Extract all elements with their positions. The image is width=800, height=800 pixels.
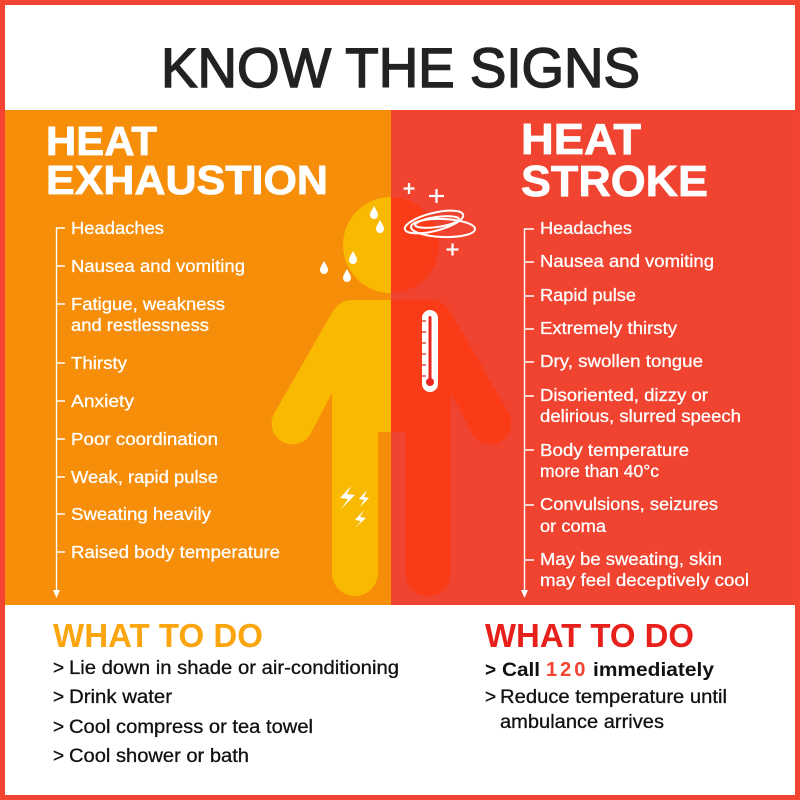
symptom list: heat exhaustion: Anxiety xyxy=(71,391,134,411)
symptom list: heat stroke xyxy=(540,218,749,590)
symptom list: heat exhaustion: Raised body temperature xyxy=(71,542,280,562)
action list: stroke: > xyxy=(485,660,496,681)
symptom list: heat stroke: Disoriented, dizzy or xyxy=(540,385,708,405)
symptom list: heat stroke: more than 40°c xyxy=(540,461,659,481)
symptom list: heat stroke: delirious, slurred speech xyxy=(540,406,741,426)
action list: stroke: immediately xyxy=(593,660,714,681)
symptom list: heat exhaustion: Fatigue, weakness xyxy=(71,294,225,314)
symptom list: heat exhaustion: Thirsty xyxy=(71,353,127,373)
symptom list: heat exhaustion: Nausea and vomiting xyxy=(71,256,245,276)
bracket arrow: right symptoms xyxy=(521,229,534,598)
action list: exhaustion: Cool shower or bath xyxy=(69,746,249,767)
action list: stroke: ambulance arrives xyxy=(500,712,664,733)
action list: stroke xyxy=(485,659,727,733)
symptom list: heat exhaustion xyxy=(71,218,280,562)
heading: what to do, stroke: WHAT TO DO xyxy=(485,617,694,654)
symptom list: heat stroke: Headaches xyxy=(540,218,632,238)
figure: half-yellow half-red person xyxy=(272,197,511,596)
action list: exhaustion: > xyxy=(53,658,64,679)
panel: heat exhaustion background xyxy=(5,110,391,605)
symptom list: heat exhaustion: Weak, rapid pulse xyxy=(71,467,218,487)
figure right half xyxy=(391,197,511,596)
action list: exhaustion: Drink water xyxy=(69,687,173,708)
action list: exhaustion: Lie down in shade or air-conditioning xyxy=(69,658,399,679)
heading: heat exhaustion: EXHAUSTION xyxy=(46,157,328,203)
icon: thermometer xyxy=(422,310,438,392)
symptom list: heat exhaustion: Sweating heavily xyxy=(71,504,211,524)
icon: sweat drops xyxy=(320,206,384,282)
action list: exhaustion xyxy=(53,658,399,767)
symptom list: heat stroke: Rapid pulse xyxy=(540,285,636,305)
heading: heat stroke: HEAT xyxy=(521,115,641,164)
symptom list: heat stroke: Convulsions, seizures xyxy=(540,494,718,514)
action list: stroke: 120 xyxy=(546,659,588,681)
figure left half xyxy=(272,197,391,596)
action list: exhaustion: Cool compress or tea towel xyxy=(69,717,313,738)
symptom list: heat stroke: Dry, swollen tongue xyxy=(540,351,703,371)
heading: heat exhaustion xyxy=(46,118,328,203)
symptom list: heat exhaustion: Poor coordination xyxy=(71,429,218,449)
bracket arrow: left symptoms xyxy=(53,228,65,598)
icon: lightning bolts xyxy=(340,486,369,528)
action list: exhaustion: > xyxy=(53,717,64,738)
symptom list: heat stroke: or coma xyxy=(540,516,606,536)
symptom list: heat stroke: Nausea and vomiting xyxy=(540,251,714,271)
action list: exhaustion: > xyxy=(53,746,64,767)
symptom list: heat stroke: Extremely thirsty xyxy=(540,318,677,338)
action list: stroke: Call xyxy=(502,660,540,681)
symptom list: heat exhaustion: Headaches xyxy=(71,218,164,238)
symptom list: heat stroke: May be sweating, skin xyxy=(540,549,722,569)
symptom list: heat stroke: Body temperature xyxy=(540,440,689,460)
action list: exhaustion: > xyxy=(53,687,64,708)
action list: stroke: Reduce temperature until xyxy=(500,687,727,708)
heading: heat stroke xyxy=(521,115,708,206)
title: KNOW THE SIGNS xyxy=(161,36,640,99)
symptom list: heat exhaustion: and restlessness xyxy=(71,315,209,335)
heading: what to do, exhaustion: WHAT TO DO xyxy=(53,617,263,654)
heading: heat exhaustion: HEAT xyxy=(46,118,157,164)
action list: stroke: > xyxy=(485,687,496,708)
panel: heat stroke background xyxy=(391,110,795,605)
symptom list: heat stroke: may feel deceptively cool xyxy=(540,570,749,590)
icon: dizziness swirl and pluses xyxy=(403,183,475,256)
heading: heat stroke: STROKE xyxy=(521,157,708,206)
